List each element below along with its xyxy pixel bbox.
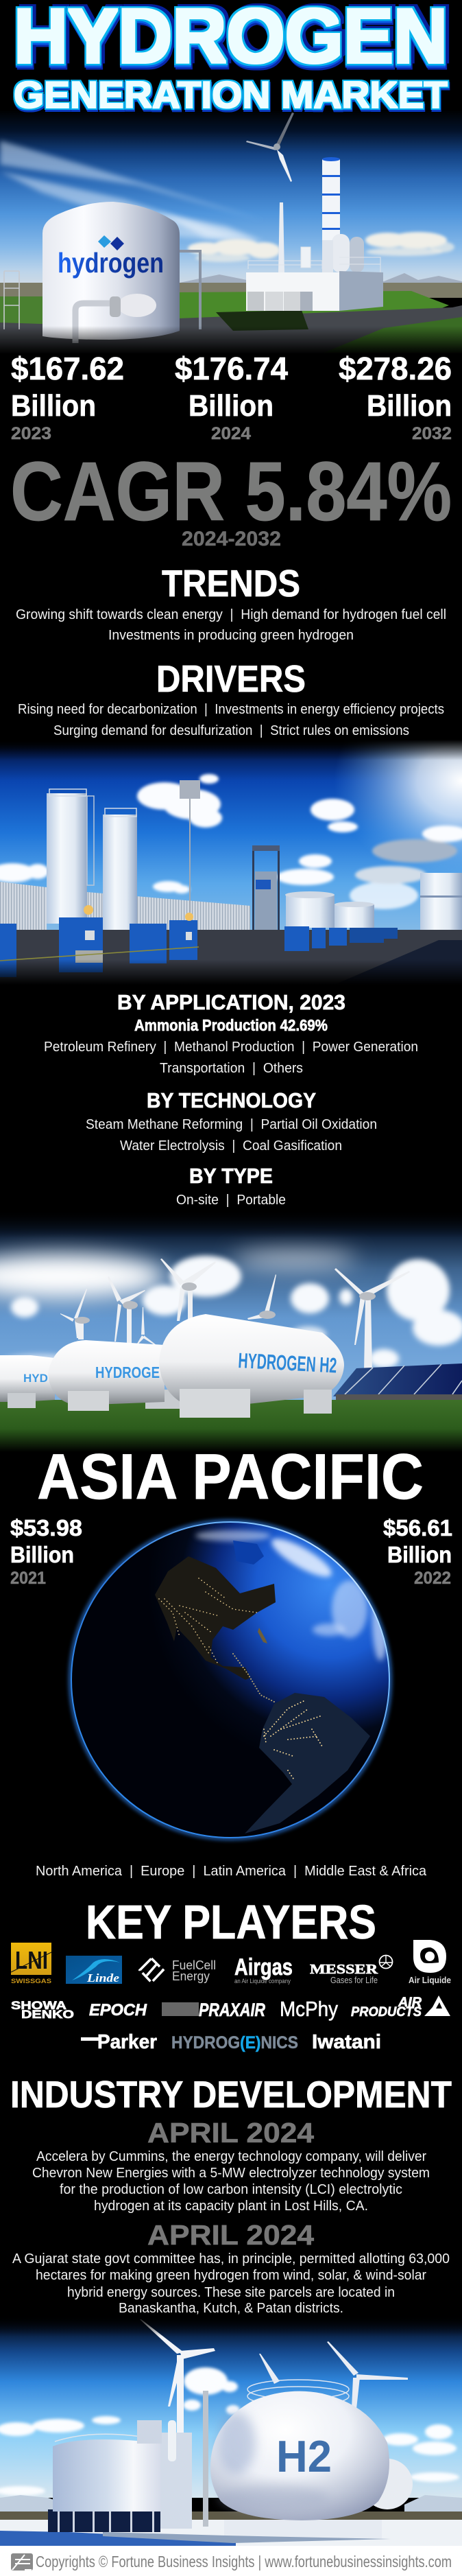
central america lights — [233, 1654, 274, 1702]
logo: Epoch: EPOCH — [89, 2001, 147, 2019]
chimney stack — [322, 157, 364, 272]
logo: Air Liquide: Air Liquide — [409, 1975, 451, 1985]
clouds — [188, 232, 454, 262]
front tank: HYDROGEN H2 — [238, 1348, 337, 1378]
logo: Showa Denko: SHOWA — [11, 1999, 66, 2012]
development: April 2024 Accelera: Chevron New Energies with a 5-MW electrolyzer technology system — [32, 2166, 430, 2181]
corrugated fence — [0, 882, 47, 933]
development: April 2024 Accelera: hydrogen at its capacity plant in Lost Hills, CA. — [94, 2199, 368, 2214]
clouds — [0, 1256, 462, 1370]
stat 2032: $278.26 — [339, 351, 452, 386]
stat 2024: $176.74 — [175, 351, 288, 386]
logo: Messer: MESSER — [310, 1962, 378, 1977]
development: April 2024 Gujarat: hybrid energy sources. These site parcels are located in — [67, 2285, 395, 2300]
process tower — [252, 845, 280, 940]
wind turbines — [60, 1258, 410, 1371]
stat 2023: 2023 — [11, 424, 51, 443]
by technology — [86, 1088, 377, 1154]
left tank — [0, 1355, 55, 1408]
lamp mast — [180, 780, 200, 913]
by type — [176, 1164, 286, 1208]
south america — [245, 1693, 370, 1834]
snowy ground — [0, 2520, 462, 2546]
logo: FuelCell Energy: FuelCell — [172, 1958, 216, 1972]
stat 2024 — [175, 351, 288, 443]
footer — [0, 2546, 462, 2576]
drivers: Surging demand for desulfurization | Strict rules on emissions — [53, 723, 409, 738]
logo: Showa Denko — [11, 1999, 74, 2021]
drivers: DRIVERS — [156, 657, 306, 700]
by technology: Steam Methane Reforming | Partial Oil Oxidation — [86, 1117, 377, 1132]
trends — [16, 562, 446, 643]
bottom fade — [0, 959, 462, 985]
storage tank — [42, 202, 180, 340]
railings — [248, 247, 380, 272]
by type: On-site | Portable — [176, 1193, 286, 1208]
pipework — [4, 251, 200, 343]
stat 2024: Billion — [189, 389, 273, 423]
wind turbine left — [140, 2319, 215, 2450]
wind turbines right — [259, 2341, 408, 2409]
stat 2022: Billion — [387, 1542, 452, 1567]
by technology: Water Electrolysis | Coal Gasification — [120, 1138, 342, 1154]
stat 2021 — [10, 1515, 82, 1588]
development: April 2024 Accelera — [32, 2117, 430, 2214]
clouds — [0, 774, 462, 909]
stat 2022: 2022 — [414, 1569, 451, 1588]
front tank — [159, 1314, 344, 1418]
trends: Growing shift towards clean energy | High demand for hydrogen fuel cell — [16, 607, 446, 622]
cabinet panels — [75, 905, 193, 963]
atmosphere glow — [71, 1521, 390, 1838]
logo: FuelCell Energy — [140, 1958, 216, 1983]
stat 2021: 2021 — [10, 1569, 46, 1588]
stat 2021: Billion — [10, 1542, 74, 1567]
by type: BY TYPE — [189, 1164, 273, 1188]
round tanks — [285, 873, 462, 932]
stat 2021: $53.98 — [10, 1515, 82, 1541]
logo: Linde — [66, 1956, 122, 1984]
sky wisps — [0, 141, 265, 244]
hudson bay — [233, 1541, 264, 1565]
stat 2032 — [339, 351, 452, 443]
illustration: earth at night — [71, 1514, 397, 1838]
title line 2: GENERATION MARKET — [14, 73, 448, 116]
left tank: HYD — [23, 1372, 48, 1385]
logo: Air Products: PRODUCTS — [351, 2005, 422, 2019]
by application: Petroleum Refinery | Methanol Production | Power Generation — [44, 1040, 418, 1055]
key players heading: KEY PLAYERS — [86, 1895, 376, 1949]
hills and ground — [0, 273, 462, 353]
development: April 2024 Gujarat: A Gujarat state govt committee has, in principle, permitted allotting 63,000 — [12, 2251, 450, 2267]
silo left — [47, 789, 94, 924]
city lights south america — [264, 1700, 322, 1781]
wind turbine — [246, 113, 294, 274]
logo: Messer — [310, 1956, 393, 1985]
ground — [0, 930, 462, 985]
corrugated fence right — [87, 892, 250, 933]
sphere base — [103, 2520, 391, 2543]
logo: Air Liquide — [409, 1940, 451, 1985]
solar panels — [333, 1363, 462, 1403]
stat 2022: $56.61 — [383, 1515, 452, 1541]
image: spherical hydrogen tank plant — [0, 2316, 462, 2546]
logo: LNI Swissgas: SWISSGAS — [11, 1978, 51, 1984]
logo: Parker: Parker — [97, 2031, 157, 2053]
logo: Linde: Linde — [86, 1971, 120, 1984]
grass — [0, 1400, 462, 1452]
development: April 2024 Gujarat — [12, 2219, 450, 2316]
development: April 2024 Gujarat: APRIL 2024 — [147, 2219, 314, 2251]
stat 2032: Billion — [367, 389, 452, 423]
logo: LNI Swissgas — [11, 1943, 51, 1984]
by application: BY APPLICATION, 2023 — [117, 990, 345, 1014]
stat 2023 — [11, 351, 124, 443]
stat 2022 — [383, 1515, 452, 1588]
title — [14, 0, 448, 116]
florida — [258, 1628, 267, 1643]
development: April 2024 Gujarat: hectares for making green hydrogen from wind, solar, & wind-solar — [36, 2268, 426, 2283]
top fade — [0, 2316, 462, 2337]
logo: Praxair — [162, 2000, 265, 2020]
stats row — [11, 351, 452, 443]
storage tank: hydrogen — [58, 247, 164, 279]
logo: Airgas: an Air Liquide company — [234, 1978, 291, 1984]
by application: Ammonia Production 42.69% — [134, 1016, 328, 1034]
top fade — [0, 740, 462, 760]
region heading: ASIA PACIFIC — [37, 1440, 424, 1512]
by technology: BY TECHNOLOGY — [147, 1088, 316, 1112]
development: April 2024 Accelera: APRIL 2024 — [147, 2117, 314, 2148]
development: April 2024 Accelera: Accelera by Cummins, the energy technology company, will deliver — [36, 2149, 426, 2164]
atmosphere rim — [71, 1522, 389, 1838]
sphere railing — [247, 2380, 349, 2406]
plant building — [246, 271, 383, 311]
middle tank — [48, 1340, 180, 1411]
pipework tower — [137, 2391, 208, 2529]
logo: Air Products: AIR — [398, 1995, 422, 2010]
stat 2032: 2032 — [412, 424, 452, 443]
trends: Investments in producing green hydrogen — [108, 628, 354, 643]
hydrogen sphere — [210, 2391, 389, 2520]
top fade — [0, 1209, 462, 1238]
logo: Praxair: PRAXAIR — [199, 2000, 265, 2020]
rear sphere — [362, 2459, 413, 2509]
stat 2023: Billion — [11, 389, 96, 423]
mountains and treeline — [0, 2495, 462, 2520]
silo right — [103, 808, 137, 938]
CAGR figure: 2024-2032 — [182, 528, 281, 550]
logo: LNI Swissgas: LNI — [15, 1946, 48, 1974]
regions list: North America | Europe | Latin America | Middle East & Africa — [36, 1864, 427, 1879]
city lights north america — [159, 1578, 257, 1664]
by application — [44, 990, 418, 1076]
image: hydrogen tanks with wind turbines and solar panels — [0, 1209, 462, 1452]
by application: Transportation | Others — [160, 1061, 303, 1076]
safety rail — [0, 947, 199, 961]
stat 2023: $167.62 — [11, 351, 124, 386]
development: April 2024 Gujarat: Banaskantha, Kutch, & Patan districts. — [119, 2301, 343, 2316]
bottom fade — [0, 326, 462, 354]
logo: McPhy: McPhy — [280, 1997, 338, 2021]
image: hydrogen plant with wind turbine — [0, 110, 462, 354]
hydrogen sphere: H2 — [276, 2431, 332, 2481]
stat 2024: 2024 — [211, 424, 251, 443]
blue cabinets — [0, 917, 398, 977]
trends: TRENDS — [162, 562, 300, 605]
logo: Airgas: Airgas — [234, 1954, 293, 1980]
drivers — [18, 657, 444, 738]
middle tank: HYDROGE — [95, 1363, 160, 1381]
key player logos — [11, 1940, 451, 2053]
logo: FuelCell Energy: Energy — [172, 1969, 210, 1983]
logo: Hydrogenics: HYDROG(E)NICS — [171, 2033, 298, 2052]
clouds — [0, 2367, 459, 2496]
logo: Messer: Gases for Life — [330, 1975, 378, 1985]
cylindrical tank — [48, 2434, 160, 2532]
globe — [71, 1522, 389, 1838]
white cloud band — [0, 1251, 356, 1298]
logo: Showa Denko: DENKO — [21, 2008, 74, 2021]
logo: Iwatani: Iwatani — [312, 2031, 381, 2053]
logo: Air Products — [351, 1995, 450, 2019]
land and clouds — [155, 1514, 397, 1834]
footer logo — [11, 2553, 33, 2571]
north america — [155, 1556, 276, 1680]
image: industrial hydrogen facility — [0, 740, 462, 985]
development: April 2024 Accelera: for the production of low carbon intensity (LCI) electrolytic — [60, 2182, 402, 2197]
